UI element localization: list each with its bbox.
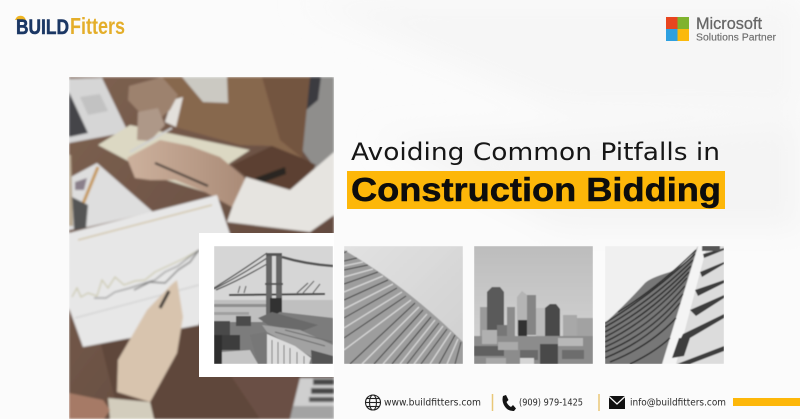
main chart paper — [69, 195, 232, 347]
photo: business meeting at a desk with charts — [69, 77, 334, 419]
logo: Microsoft Solutions Partner — [666, 15, 776, 44]
lower hand with pen — [117, 280, 183, 402]
image: bridge under construction — [214, 246, 333, 364]
icon: phone — [502, 395, 516, 411]
phone number: (909) 979-1425 — [519, 398, 583, 408]
shirt cuff — [165, 97, 183, 127]
grey room background — [300, 77, 334, 172]
white shirt — [182, 77, 228, 103]
bridge cables — [214, 253, 267, 290]
chart lines on paper — [72, 205, 212, 318]
image: curved skyscraper facade — [344, 246, 463, 364]
bridge tower — [265, 253, 283, 316]
city rooftops — [214, 312, 333, 364]
Solutions Partner text: Solutions Partner — [696, 32, 776, 44]
white panel behind image row — [199, 233, 334, 377]
white sleeve — [227, 152, 334, 232]
paper on left — [69, 163, 153, 230]
website: www.buildfitters.com — [384, 398, 481, 408]
black pen — [155, 163, 208, 186]
white central mast — [672, 247, 706, 364]
image: modern tower with fins — [605, 246, 724, 364]
white building — [267, 334, 311, 364]
brown jacket — [162, 77, 310, 158]
desk surface — [69, 77, 334, 419]
logo Fitters wordmark: Fitters — [70, 13, 125, 39]
icon: envelope — [609, 396, 625, 409]
yellow accent bar — [733, 398, 800, 406]
dark desk item — [232, 146, 316, 190]
yellow highlight band — [347, 171, 725, 209]
title line one: Avoiding Common Pitfalls in — [351, 138, 720, 166]
foreground arm and hand — [127, 140, 248, 207]
logo sun icon — [15, 16, 26, 20]
notebook — [98, 125, 250, 192]
lower city blocks — [474, 336, 593, 364]
seated person's hands — [128, 77, 178, 120]
email: info@buildfitters.com — [630, 398, 726, 408]
chair — [306, 77, 322, 110]
icon: globe — [366, 395, 380, 410]
right facade — [672, 246, 724, 364]
logo BUILD wordmark: BUILD — [16, 16, 69, 39]
laptop bottom right — [290, 378, 334, 419]
title — [347, 138, 725, 209]
title line two: Construction Bidding — [351, 171, 721, 208]
pencil and cup — [81, 166, 100, 204]
cranes — [238, 281, 320, 293]
logo: BuildFitters — [15, 13, 125, 39]
Microsoft four-square icon — [666, 17, 689, 41]
image: city skyline — [474, 246, 593, 364]
bridge deck — [229, 294, 325, 295]
pen — [146, 126, 174, 143]
dark curved facade — [605, 246, 698, 364]
left hand at bottom — [69, 393, 110, 419]
lower cuff — [108, 398, 154, 419]
river haze — [214, 300, 333, 322]
contact bar — [366, 394, 800, 411]
Microsoft wordmark: Microsoft — [696, 15, 762, 33]
laptop top left — [69, 78, 128, 143]
dark fins — [672, 248, 724, 364]
